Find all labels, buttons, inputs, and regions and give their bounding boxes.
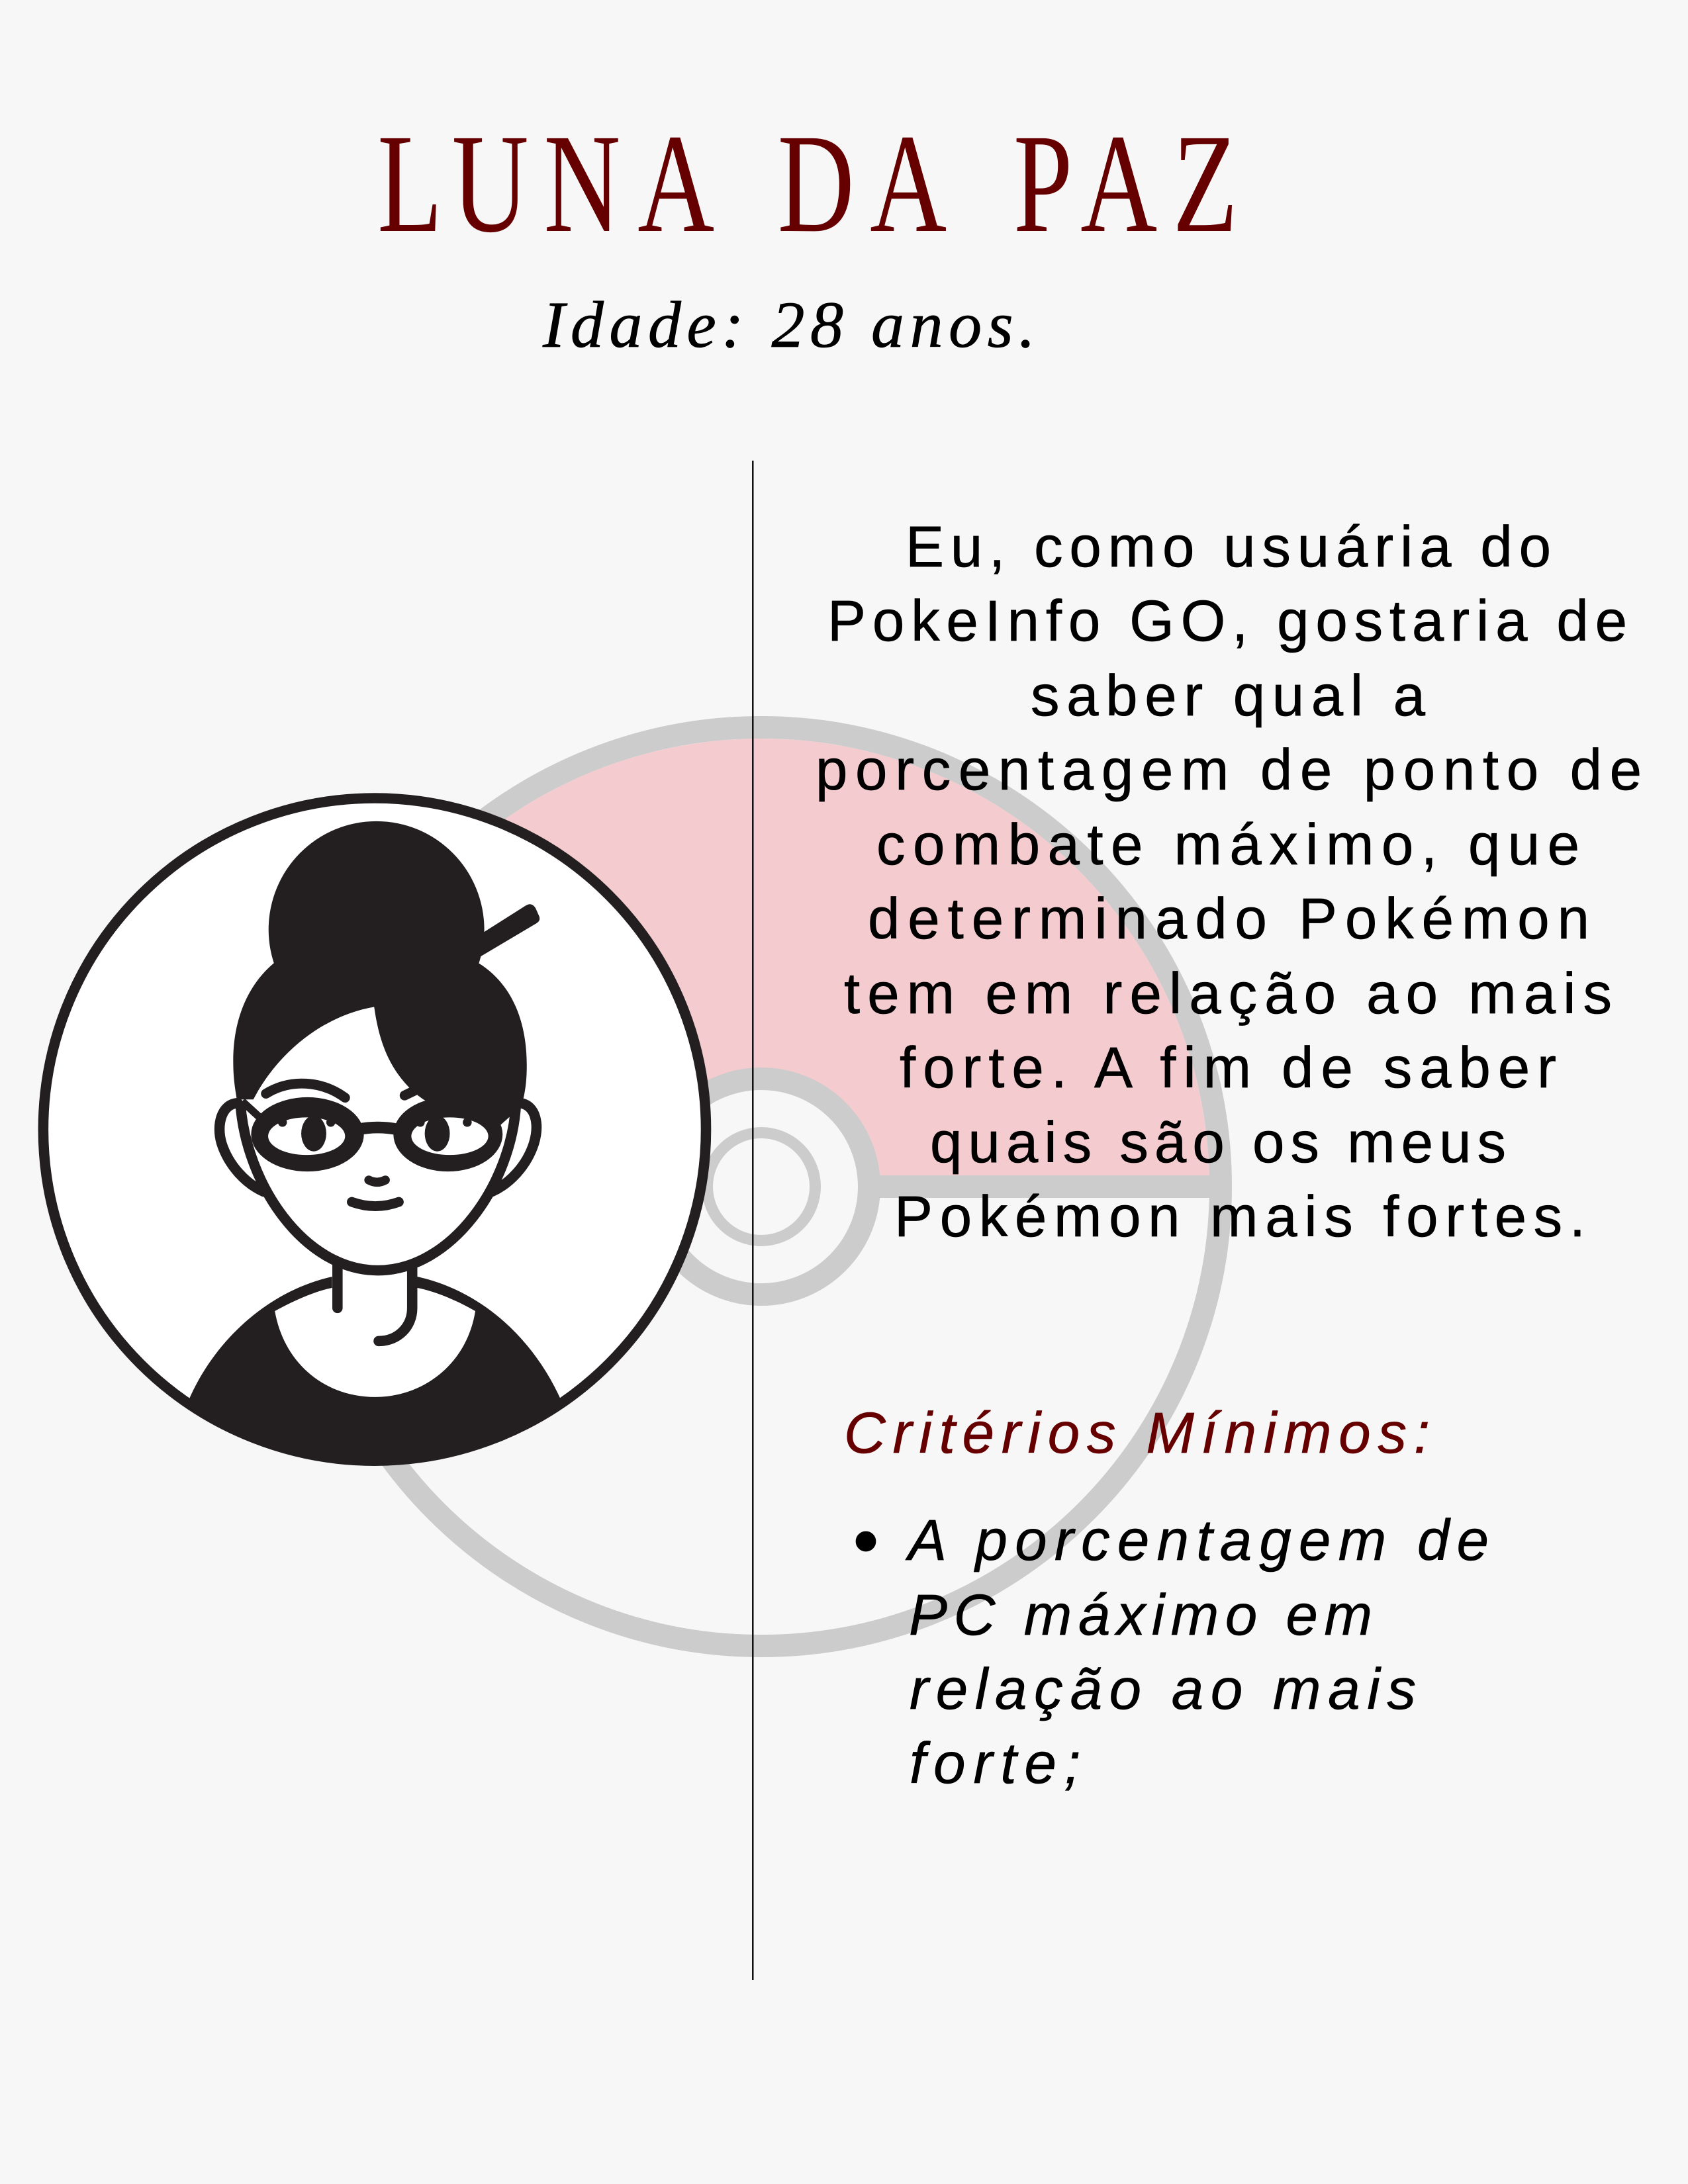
description text xyxy=(816,515,1642,1249)
pokeball background xyxy=(302,727,1221,1646)
description text: quais são os meus xyxy=(930,1111,1506,1175)
eyebrow right xyxy=(404,1088,420,1095)
description text: saber qual a xyxy=(1031,664,1426,728)
criteria bullet list: PC máximo em xyxy=(909,1583,1372,1647)
description text: forte. A fim de saber xyxy=(900,1036,1556,1100)
ears xyxy=(220,1103,536,1192)
avatar: woman with glasses xyxy=(43,798,706,1497)
criteria bullet list: relação ao mais xyxy=(910,1657,1416,1721)
hair bun xyxy=(269,821,485,1038)
description text: Pokémon mais fortes. xyxy=(894,1185,1585,1249)
description text: tem em relação ao mais xyxy=(844,962,1612,1026)
description text: porcentagem de ponto de xyxy=(816,738,1642,802)
face xyxy=(240,1007,516,1271)
description text: combate máximo, que xyxy=(876,813,1579,877)
nose and mouth xyxy=(352,1180,399,1206)
criteria bullet list: forte; xyxy=(910,1731,1080,1796)
age subtitle: Idade: 28 anos. xyxy=(542,288,1035,361)
criteria bullet list: A porcentagem de xyxy=(905,1508,1489,1572)
title: LUNA DA PAZ xyxy=(377,105,1238,261)
description text: determinado Pokémon xyxy=(868,887,1589,951)
heading: minimum criteria: Critérios Mínimos: xyxy=(844,1401,1430,1465)
hair xyxy=(233,904,539,1121)
glasses xyxy=(242,1097,514,1171)
vertical divider xyxy=(752,461,753,1980)
description text: PokeInfo GO, gostaria de xyxy=(827,589,1627,653)
eyebrow left xyxy=(266,1083,345,1098)
neck xyxy=(338,1262,412,1341)
description text: Eu, como usuária do xyxy=(906,515,1551,579)
shirt and shoulders xyxy=(189,1277,560,1456)
criteria bullet list xyxy=(856,1508,1489,1796)
